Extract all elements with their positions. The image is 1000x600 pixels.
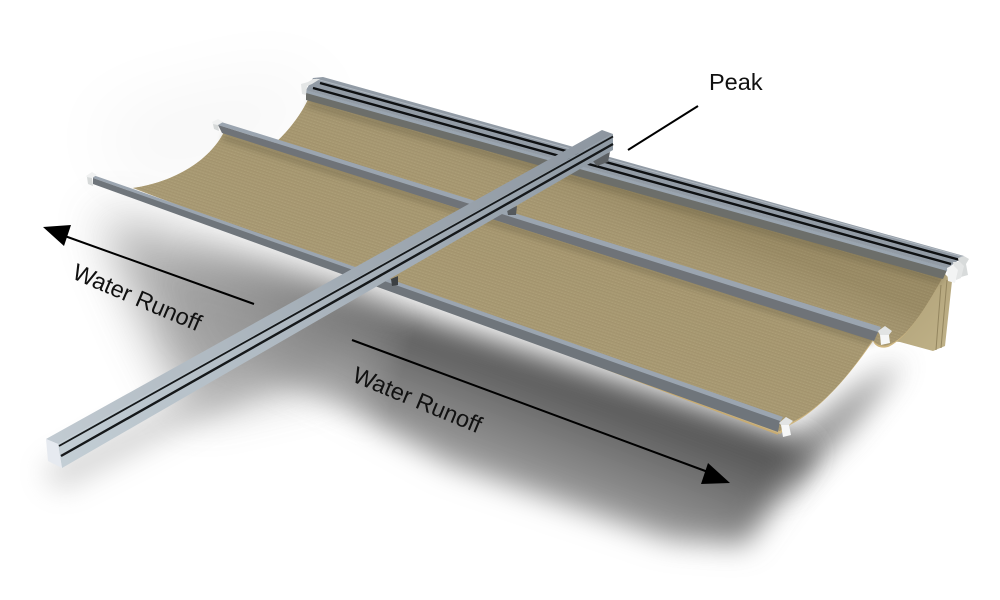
label: water runoff left: Water Runoff xyxy=(69,259,206,336)
cross bar xyxy=(46,130,613,468)
middle bar xyxy=(212,119,892,345)
middle bar near cap xyxy=(212,119,223,131)
fabric canopy xyxy=(133,95,952,434)
label: water runoff right: Water Runoff xyxy=(349,362,486,438)
back fold of fabric xyxy=(880,274,952,351)
label: Peak: Peak xyxy=(709,69,763,95)
ground shadow xyxy=(42,70,905,545)
rail end caps xyxy=(301,79,969,283)
arrow: water runoff left xyxy=(43,225,254,304)
front bar near cap xyxy=(86,172,97,186)
front bar far cap xyxy=(779,417,793,437)
bracket clamps xyxy=(391,152,610,286)
fabric lower edge xyxy=(133,190,778,434)
front bar xyxy=(86,172,793,437)
middle bar far cap xyxy=(878,326,892,345)
top rail (peak) xyxy=(301,77,969,284)
arrow: water runoff right xyxy=(352,340,730,484)
peak leader line xyxy=(628,106,698,150)
